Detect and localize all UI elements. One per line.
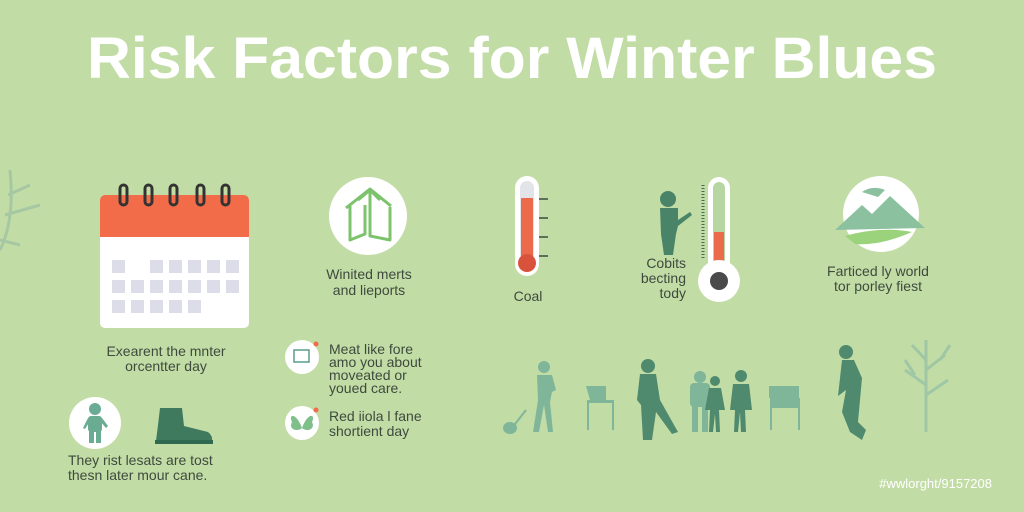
icon: boot [155,408,213,444]
icon: person circle [69,397,121,449]
text: monitor caption [329,341,422,396]
text: butterfly caption: shortient day [329,423,409,439]
icon: house circle [329,177,407,255]
text: house caption: Winited merts [326,266,412,282]
title: Risk Factors for Winter Blues [87,26,937,91]
tree [905,340,950,432]
text: person thermometer caption: Cobits [646,255,686,271]
text: monitor caption: moveated or [329,367,407,383]
illustration: silhouettes row [503,340,950,440]
text: world caption: tor porley fiest [834,278,922,294]
text: Coal: Coal [514,288,542,304]
text: world caption: Farticed ly world [827,263,929,279]
icon: calendar [100,185,249,328]
text: world caption [827,263,929,294]
text: calendar caption: Exearent the mnter [106,343,226,359]
icon: small monitor circle [285,340,319,374]
icon: mountain globe [835,176,925,252]
text: person caption: thesn later mour cane. [68,467,207,483]
decorative branch left [0,170,40,250]
text: person caption [68,452,213,483]
text: person caption: They rist lesats are tost [68,452,213,468]
text: person thermometer caption: becting [641,270,686,286]
text: monitor caption: youed care. [329,380,402,396]
icon: butterfly circle [285,406,319,440]
text: footer hashtag: #wwlorght/9157208 [879,476,992,491]
text: calendar caption: orcentter day [125,358,207,374]
text: butterfly caption: Red iiola l fane [329,408,422,424]
text: monitor caption: Meat like fore [329,341,413,357]
text: person thermometer caption: tody [660,285,686,301]
text: house caption: and lieports [333,282,405,298]
text: calendar caption [106,343,226,374]
text: house caption [326,266,412,298]
icon: thermometer left [515,176,548,276]
text: butterfly caption [329,408,422,439]
text: person thermometer caption [641,255,686,301]
icon: person with thermometer [660,177,740,302]
text: monitor caption: amo you about [329,354,422,370]
